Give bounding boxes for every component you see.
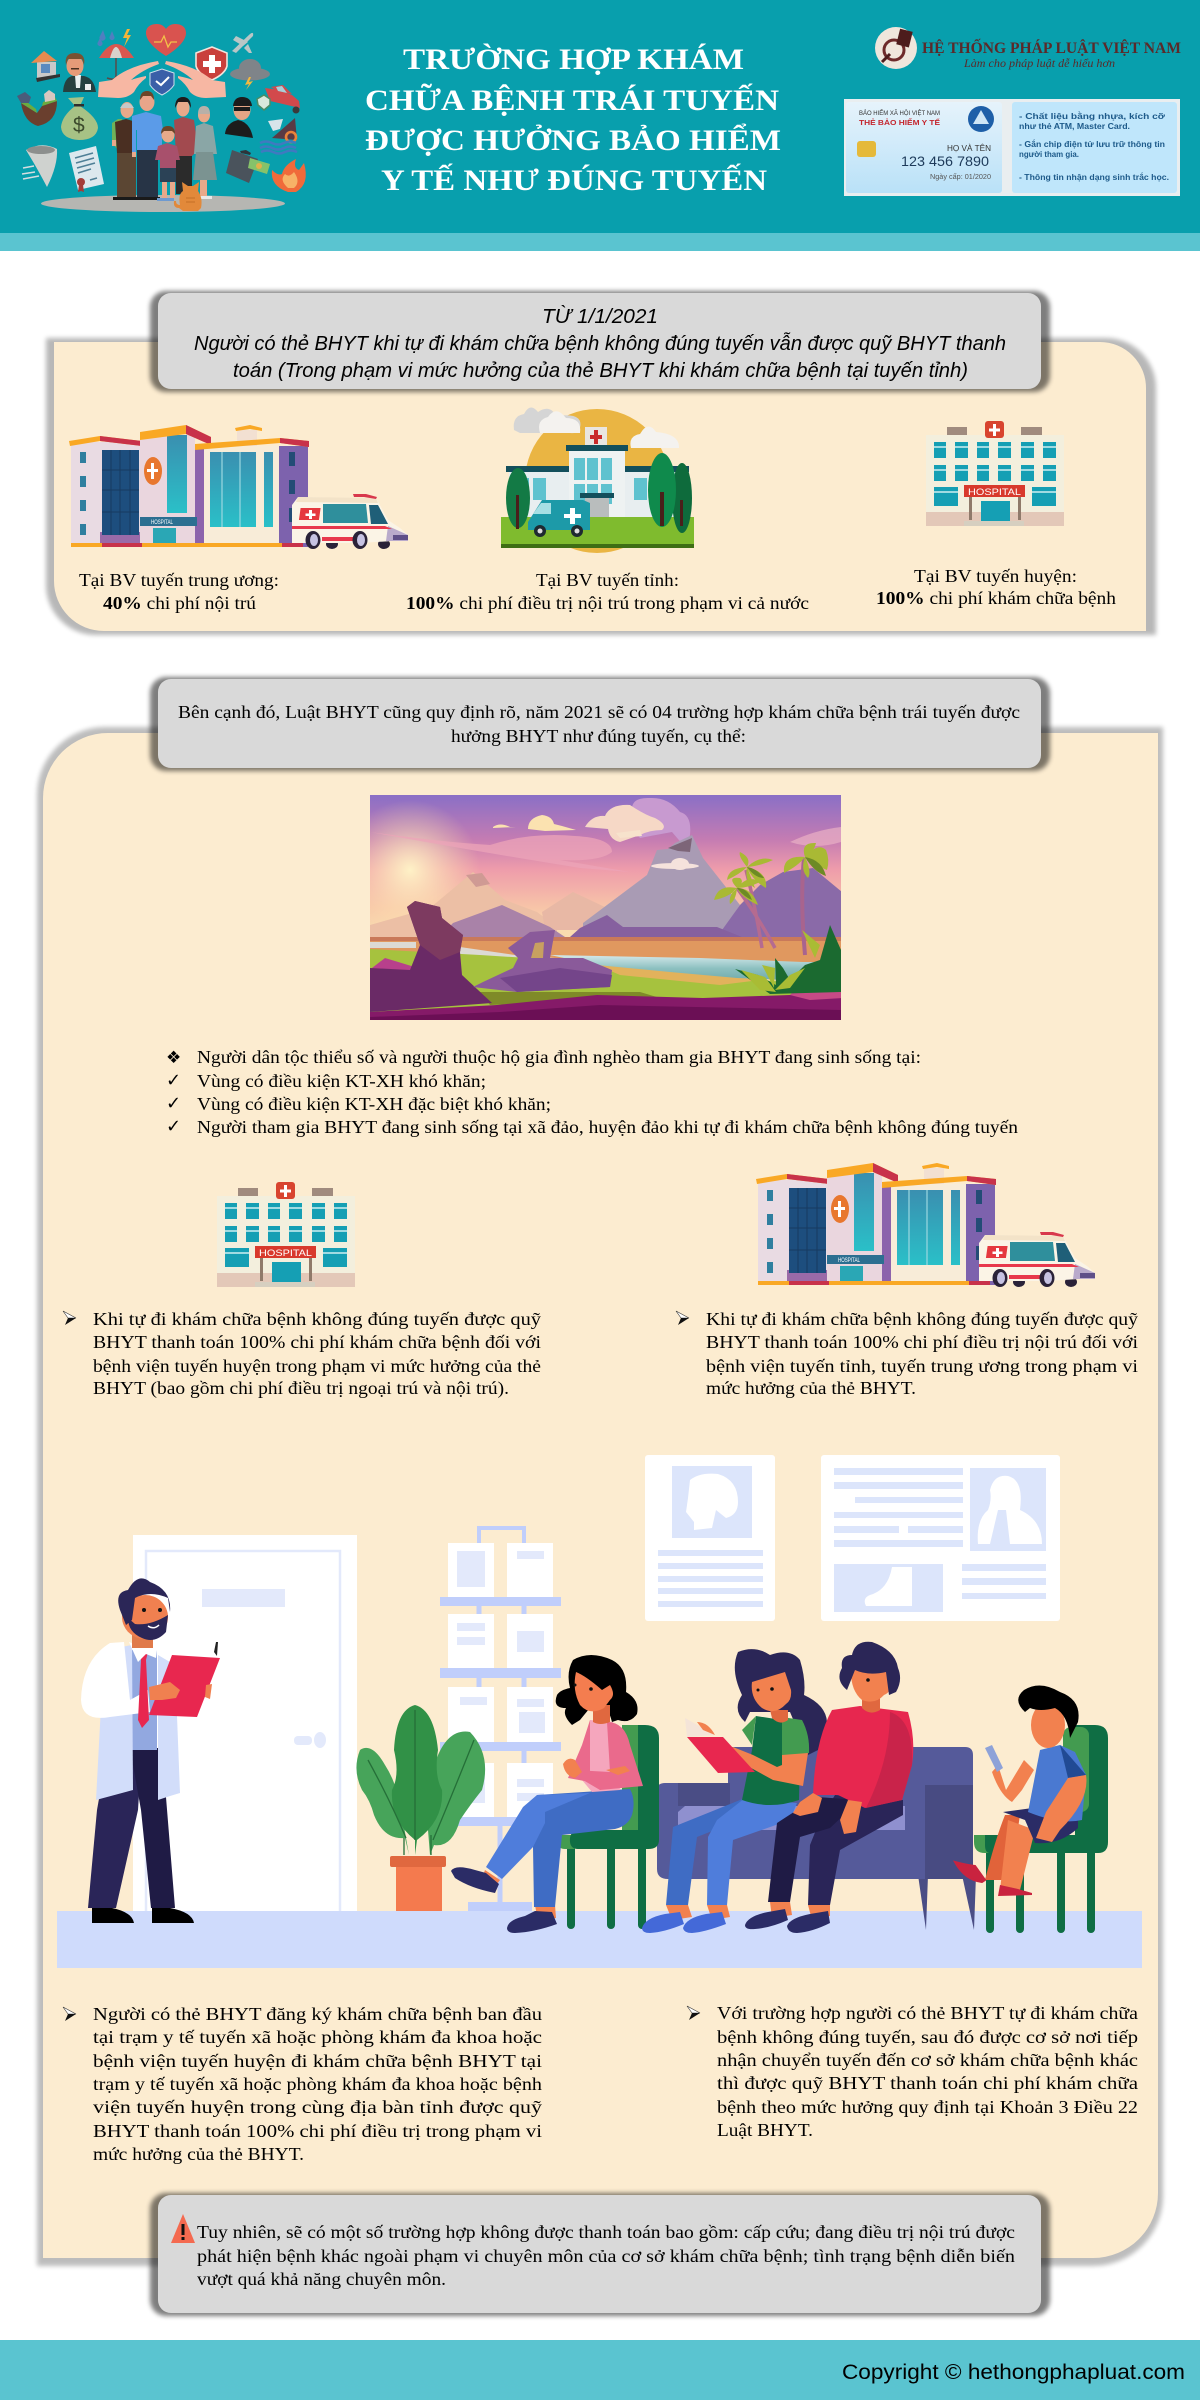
icon: money bag: $ [73, 114, 85, 137]
callout: exceptions warning: Tuy nhiên, sẽ có một số trường hợp không được thanh toán bao gồm: cấp cứu; đang điều trị nội trú được [197, 2222, 1015, 2242]
logo: Hệ thống pháp luật Việt Nam: HỆ THỐNG PHÁP LUẬT VIỆT NAM [922, 37, 1181, 57]
icon: red car and shield [257, 85, 300, 114]
label: central hospital: Tại BV tuyến trung ương: [79, 570, 279, 590]
sofa [657, 1747, 976, 1930]
heading box: from 1/1/2021: TỪ 1/1/2021 [542, 305, 658, 328]
card front: Ngày cấp: 01/2020 [930, 172, 991, 181]
text block: primary care registration rule: bệnh viện tuyến huyện đi khám chữa bệnh BHYT tại [93, 2051, 542, 2071]
title: Y TẾ NHƯ ĐÚNG TUYẾN [381, 163, 767, 197]
illustration: family protected by insurance with risk icons [17, 24, 306, 212]
icon: blue shield [150, 69, 174, 95]
label: central hospital [79, 570, 279, 613]
text block: referral rule: nhận chuyển tuyến đến cơ sở khám chữa bệnh khác [717, 2050, 1138, 2070]
text block: referral rule: bệnh theo mức hưởng quy định tại Khoản 3 Điều 22 [717, 2097, 1138, 2117]
list: eligible groups [166, 1047, 1018, 1137]
label: provincial hospital: 100% chi phí điều trị nội trú trong phạm vi cả nước [406, 593, 809, 613]
icon: district hospital: HOSPITAL [968, 487, 1021, 497]
foreground plants [735, 925, 841, 994]
icon: briefcase with money [226, 150, 270, 183]
heading box: four cases: Bên cạnh đó, Luật BHYT cũng quy định rõ, năm 2021 sẽ có 04 trường hợp khám chữa bệnh trái tuyến được [178, 702, 1020, 722]
text block: primary care registration rule: Người có thẻ BHYT đăng ký khám chữa bệnh ban đầu [93, 2004, 542, 2024]
icon: tornado [22, 145, 57, 187]
woman with book [642, 1649, 827, 1933]
grandmother [193, 106, 217, 199]
panel: four cases [37, 677, 1163, 2266]
list: eligible groups: Vùng có điều kiện KT-XH đặc biệt khó khăn; [197, 1094, 551, 1114]
panel: coverage from 1/1/2021 [46, 291, 1156, 635]
chair right [974, 1725, 1108, 1929]
list: eligible groups: ✓ [166, 1116, 181, 1137]
text block: district hospital rule: bệnh viện tuyến huyện trong phạm vi mức hưởng của thẻ [93, 1356, 541, 1376]
text block: provincial and central hospital rule: bệnh viện tuyến tỉnh, tuyến trung ương trong phạm vi [706, 1356, 1138, 1376]
heading box: four cases [150, 677, 1050, 771]
text block: district hospital rule: BHYT thanh toán 100% chi phí khám chữa bệnh đối với [93, 1332, 541, 1352]
title [365, 43, 781, 197]
icon: man in suit [63, 53, 96, 92]
text block: primary care registration rule: viện tuyến huyện trong cùng địa bàn tỉnh được quỹ [93, 2097, 542, 2117]
card back text: - Thông tin nhận dạng sinh trắc học. [1019, 173, 1169, 182]
text block: district hospital rule [63, 1309, 541, 1398]
heading box: four cases: hưởng BHYT như đúng tuyến, cụ thể: [451, 726, 746, 746]
text block: provincial and central hospital rule [676, 1309, 1138, 1398]
icon: umbrella with rain [98, 29, 134, 79]
icon: fire [272, 159, 306, 192]
icon: collapsed land [17, 90, 57, 126]
card front: BẢO HIỂM XÃ HỘI VIỆT NAM [859, 109, 940, 117]
child [155, 126, 180, 201]
text block: referral rule: Luật BHYT. [717, 2120, 813, 2140]
list: eligible groups: ✓ [166, 1070, 181, 1091]
grandfather [112, 102, 139, 200]
illustration: clinic waiting room [57, 1455, 1142, 1968]
callout: exceptions warning: phát hiện bệnh khác ngoài phạm vi chuyên môn của cơ sở khám chữa bệnh; tình trạng bệnh diễn biến [197, 2246, 1015, 2266]
text block: primary care registration rule: BHYT thanh toán 100% chi phí điều trị trong phạm vi [93, 2121, 542, 2141]
poster: skull x-ray [645, 1455, 775, 1621]
title: CHỮA BỆNH TRÁI TUYẾN [365, 83, 779, 117]
health insurance card [844, 99, 1180, 196]
icon: central hospital with ambulance: HOSPITAL [151, 520, 173, 526]
potted plant [356, 1705, 485, 1911]
ground shadow [41, 195, 285, 212]
icon: house [31, 51, 60, 82]
heading box: from 1/1/2021: toán (Trong phạm vi mức hưởng của thẻ BHYT khi khám chữa bệnh tại tuyến tỉnh) [233, 360, 968, 382]
logo: Hệ thống pháp luật Việt Nam: Làm cho pháp luật dễ hiểu hơn [963, 56, 1115, 70]
title: TRƯỜNG HỢP KHÁM [403, 43, 744, 76]
callout: exceptions warning [150, 2193, 1050, 2316]
label: district hospital: Tại BV tuyến huyện: [914, 566, 1077, 586]
label: district hospital [876, 566, 1116, 608]
boy with phone [955, 1685, 1086, 1896]
poster: lungs and foot x-ray [821, 1455, 1060, 1621]
icon: district hospital [217, 1182, 355, 1287]
card back text [1012, 102, 1177, 193]
icon: thief [225, 97, 253, 138]
list: eligible groups: ✓ [166, 1093, 181, 1114]
card back text: - Gắn chip điện tử lưu trữ thông tin [1019, 140, 1165, 149]
icon: central hospital with ambulance: HOSPITAL [838, 1258, 860, 1264]
palm trees [714, 843, 828, 955]
icon: provincial hospital [501, 407, 694, 553]
text block: referral rule [687, 2003, 1138, 2140]
chair left [558, 1725, 659, 1925]
floor [57, 1911, 1142, 1968]
icon: crashing plane [232, 33, 253, 53]
card back text: người tham gia. [1019, 150, 1079, 159]
card front [846, 102, 1002, 193]
list: eligible groups: Người dân tộc thiểu số và người thuộc hộ gia đình nghèo tham gia BHYT đang sinh sống tại: [197, 1047, 921, 1067]
icon: sinking ship [260, 118, 297, 154]
volcano smoke [585, 798, 690, 846]
icon: heart [146, 24, 186, 56]
title: ĐƯỢC HƯỞNG BẢO HIỂM [365, 124, 781, 157]
card back text: như thẻ ATM, Master Card. [1019, 122, 1130, 131]
logo: Hệ thống pháp luật Việt Nam [875, 27, 1181, 70]
icon: warning triangle [171, 2214, 195, 2243]
label: provincial hospital [406, 570, 809, 613]
header band [0, 0, 1200, 251]
card front: THẺ BẢO HIỂM Y TẾ [859, 117, 940, 127]
footer [0, 2340, 1200, 2400]
icon: central hospital with ambulance [756, 1163, 1095, 1287]
text block: referral rule: Với trường hợp người có thẻ BHYT tự đi khám chữa [717, 2003, 1138, 2023]
text block: referral rule: bệnh không đúng tuyến, sau đó được cơ sở nơi tiếp [717, 2027, 1138, 2047]
illustration: volcanic landscape [340, 795, 842, 1020]
text block: primary care registration rule: mức hưởng của thẻ BHYT. [93, 2144, 304, 2164]
text block: district hospital rule: Khi tự đi khám chữa bệnh không đúng tuyến được quỹ [93, 1309, 541, 1329]
icon: money bag [61, 97, 98, 140]
footer: Copyright © hethongphapluat.com [842, 2361, 1185, 2384]
woman in pink [451, 1655, 643, 1933]
heading box: from 1/1/2021 [150, 291, 1050, 392]
text block: primary care registration rule: tại trạm y tế tuyến xã hoặc phòng khám đa khoa hoặc [93, 2027, 542, 2047]
callout: exceptions warning: vượt quá khả năng chuyên môn. [197, 2269, 446, 2289]
doctor [81, 1578, 220, 1923]
icon: district hospital [926, 421, 1064, 526]
card front: 123 456 7890 [901, 153, 989, 169]
list: eligible groups: Vùng có điều kiện KT-XH khó khăn; [197, 1071, 486, 1091]
door [133, 1535, 357, 1911]
icon: document [69, 146, 104, 192]
mother [174, 97, 198, 194]
icon: district hospital: HOSPITAL [259, 1248, 312, 1258]
cat [174, 182, 202, 211]
icon: central hospital with ambulance [69, 425, 408, 549]
card front: HỌ VÀ TÊN [947, 144, 991, 153]
list: eligible groups: ❖ [166, 1048, 181, 1068]
icon: gavel seal [875, 27, 917, 69]
icon: hands [98, 61, 226, 98]
text block: provincial and central hospital rule: BHYT thanh toán 100% chi phí điều trị nội trú đối với [706, 1332, 1138, 1352]
brochure rack [440, 1528, 561, 1911]
list: eligible groups: Người tham gia BHYT đang sinh sống tại xã đảo, huyện đảo khi tự đi khám chữa bệnh không đúng tuyến [197, 1117, 1018, 1137]
label: district hospital: 100% chi phí khám chữa bệnh [876, 588, 1116, 608]
text block: primary care registration rule [63, 2004, 542, 2164]
heading box: from 1/1/2021: Người có thẻ BHYT khi tự đi khám chữa bệnh không đúng tuyến vẫn được quỹ BHYT thanh [194, 332, 1006, 355]
text block: primary care registration rule: trạm y tế tuyến xã hoặc phòng khám đa khoa hoặc bệnh [93, 2074, 542, 2094]
text block: referral rule: thì được quỹ BHYT thanh toán chi phí khám chữa [717, 2073, 1138, 2093]
text block: district hospital rule: BHYT (bao gồm chi phí điều trị ngoại trú và nội trú). [93, 1378, 509, 1398]
label: central hospital: 40% chi phí nội trú [103, 593, 256, 613]
label: provincial hospital: Tại BV tuyến tỉnh: [536, 570, 679, 590]
text block: provincial and central hospital rule: Khi tự đi khám chữa bệnh không đúng tuyến được quỹ [706, 1309, 1138, 1329]
man in red sweater [745, 1642, 913, 1933]
icon: storm cloud [230, 59, 270, 90]
text block: provincial and central hospital rule: mức hưởng của thẻ BHYT. [706, 1378, 916, 1398]
father [132, 91, 163, 200]
icon: red shield [196, 47, 227, 80]
card back text: - Chất liệu bằng nhựa, kích cỡ [1019, 112, 1165, 121]
